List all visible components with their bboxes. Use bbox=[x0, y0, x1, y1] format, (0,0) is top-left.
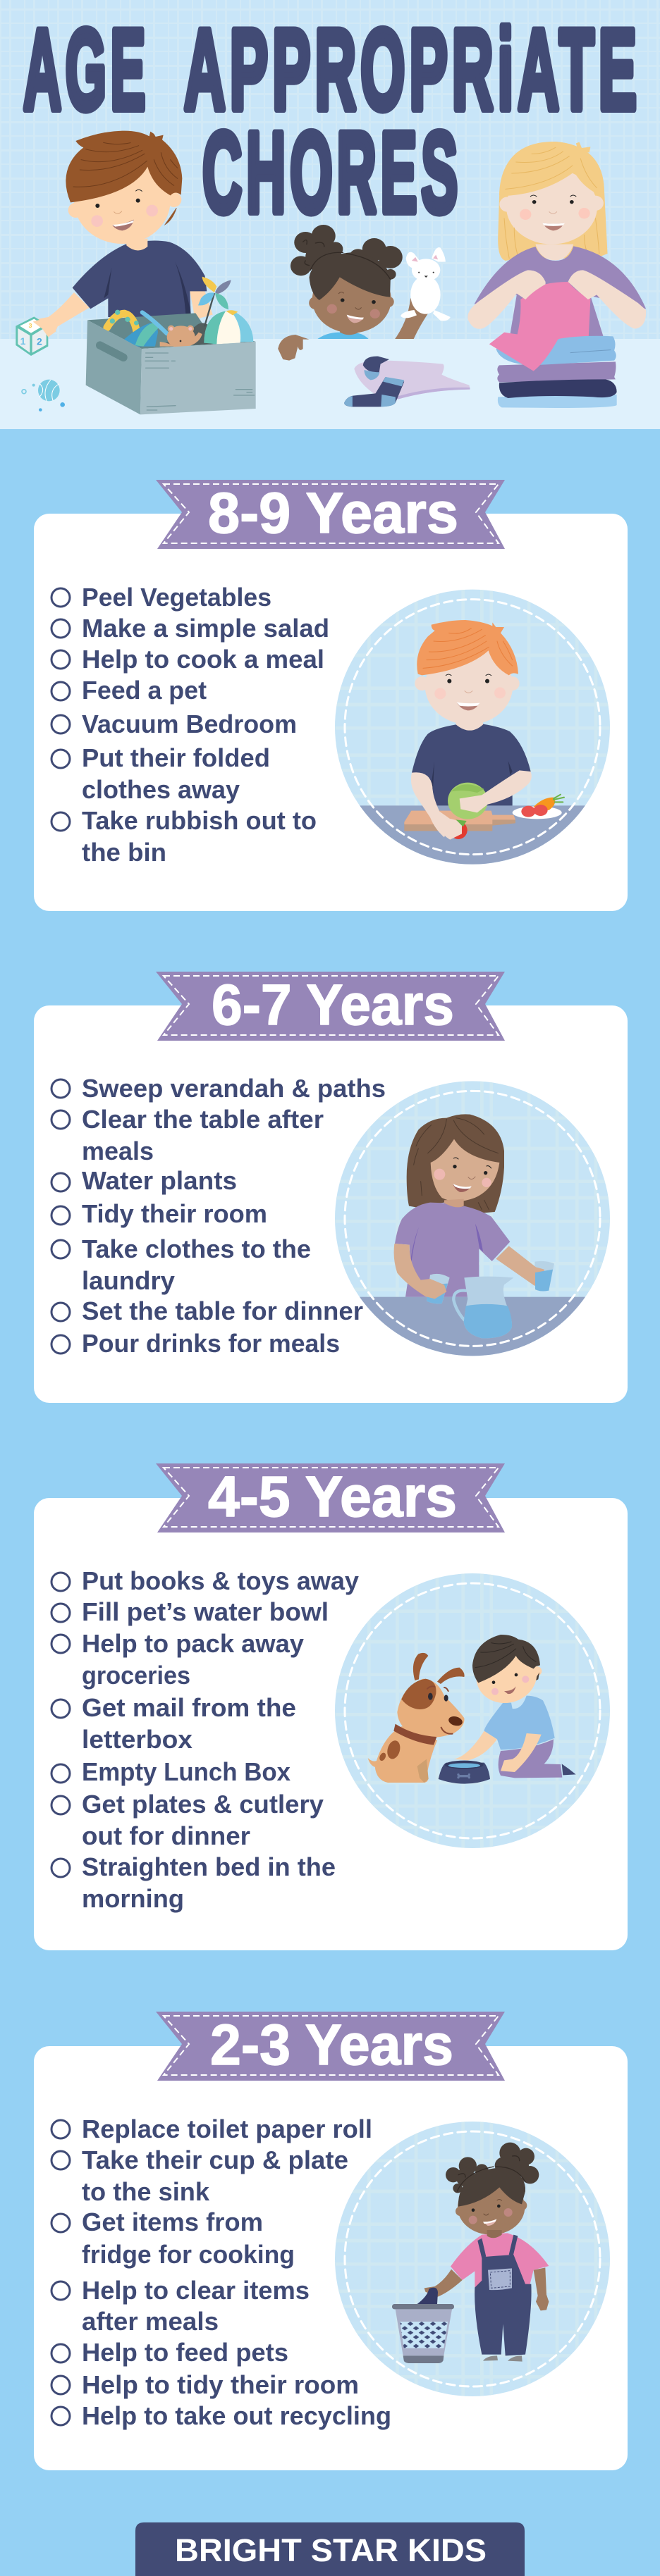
alphabet block in boy's hand: 3 bbox=[29, 322, 32, 329]
cutting board bbox=[404, 811, 515, 831]
ribbon heading: 4-5 Years bbox=[208, 1465, 457, 1529]
ribbon heading: 2-3 Years bbox=[210, 2013, 453, 2077]
cloth and socks bbox=[344, 357, 470, 407]
ribbon heading bbox=[156, 480, 505, 549]
chore checklist: Empty Lunch Box bbox=[82, 1757, 291, 1786]
bunny toy bbox=[401, 247, 451, 321]
folded clothes stack bbox=[489, 333, 617, 408]
card bbox=[34, 2046, 628, 2470]
chore checklist: Help to clear items bbox=[82, 2276, 310, 2305]
chore checklist: Feed a pet bbox=[82, 676, 207, 705]
toy plane bbox=[124, 323, 158, 347]
chore checklist: to the sink bbox=[82, 2177, 210, 2206]
plate with tomato and carrot bbox=[513, 806, 562, 819]
chore checklist: laundry bbox=[82, 1266, 175, 1295]
alphabet block in boy's hand: 2 bbox=[37, 335, 42, 347]
chore checklist: Fill pet’s water bowl bbox=[82, 1597, 329, 1626]
ribbon heading bbox=[156, 972, 505, 1041]
illustration: toddler with laundry basket bbox=[331, 2121, 613, 2403]
chore checklist: Make a simple salad bbox=[82, 614, 329, 643]
ribbon heading: 8-9 Years bbox=[208, 481, 458, 545]
boy with brown hair bbox=[33, 131, 213, 337]
footer brand bar bbox=[135, 2522, 525, 2576]
chore checklist: Pour drinks for meals bbox=[82, 1329, 340, 1358]
left cup and arm bbox=[427, 1274, 450, 1304]
panel: 6-7 years bbox=[34, 972, 628, 1403]
ribbon heading bbox=[156, 1463, 505, 1532]
chore checklist: Tidy their room bbox=[82, 1199, 267, 1228]
chore checklist bbox=[51, 583, 329, 867]
chore checklist bbox=[51, 1074, 386, 1358]
table surface bbox=[0, 339, 660, 429]
alphabet block in boy's hand bbox=[16, 316, 56, 356]
card bbox=[34, 514, 628, 911]
chore checklist: Water plants bbox=[82, 1166, 237, 1195]
chore checklist: Put their folded bbox=[82, 743, 270, 772]
chore checklist: Help to cook a meal bbox=[82, 645, 324, 674]
chore checklist: after meals bbox=[82, 2307, 219, 2336]
kneeling boy bbox=[453, 1635, 576, 1778]
illustration: boy preparing vegetables bbox=[331, 585, 613, 872]
chore checklist: Vacuum Bedroom bbox=[82, 710, 297, 738]
chore checklist: meals bbox=[82, 1137, 154, 1165]
chore checklist: morning bbox=[82, 1884, 184, 1913]
chore checklist: Take clothes to the bbox=[82, 1234, 311, 1263]
dog bbox=[368, 1653, 465, 1783]
toy box bbox=[86, 277, 256, 414]
header illustration panel bbox=[0, 0, 660, 429]
panel: 2-3 years bbox=[34, 2012, 628, 2470]
footer brand bar: BRIGHT STAR KIDS bbox=[175, 2532, 487, 2568]
chore checklist: Clear the table after bbox=[82, 1105, 324, 1134]
chore checklist: Peel Vegetables bbox=[82, 583, 271, 612]
chore checklist: Get mail from the bbox=[82, 1693, 296, 1722]
ribbon heading: 6-7 Years bbox=[212, 973, 454, 1037]
girl with curly buns and bunny bbox=[291, 225, 451, 342]
right cup and arm bbox=[534, 1261, 554, 1292]
title bbox=[23, 6, 641, 237]
panel: 4-5 years bbox=[34, 1463, 628, 1950]
water bowl bbox=[439, 1761, 490, 1784]
chore checklist: Help to feed pets bbox=[82, 2338, 288, 2367]
title: AGE bbox=[23, 6, 149, 134]
chore checklist: Help to tidy their room bbox=[82, 2370, 359, 2399]
card bbox=[34, 1005, 628, 1403]
chore checklist: Sweep verandah & paths bbox=[82, 1074, 386, 1103]
ribbon heading bbox=[156, 2012, 505, 2081]
card bbox=[34, 1498, 628, 1950]
alphabet block in boy's hand: 1 bbox=[20, 335, 26, 347]
chore checklist: the bin bbox=[82, 838, 166, 867]
pinwheel bbox=[198, 277, 231, 326]
toddler bbox=[424, 2143, 549, 2362]
chore checklist: clothes away bbox=[82, 775, 240, 804]
chore checklist: Set the table for dinner bbox=[82, 1296, 363, 1325]
chore checklist bbox=[51, 1566, 359, 1913]
chore checklist: Put books & toys away bbox=[82, 1566, 359, 1595]
water jug bbox=[453, 1277, 513, 1338]
chore checklist: letterbox bbox=[82, 1725, 192, 1754]
ring toy bbox=[107, 314, 137, 333]
chore checklist: Straighten bed in the bbox=[82, 1852, 336, 1881]
panel: 8-9 years bbox=[34, 480, 628, 911]
chore checklist: Help to take out recycling bbox=[82, 2401, 391, 2430]
chore checklist: out for dinner bbox=[82, 1821, 250, 1850]
girl's hand on table bbox=[278, 335, 310, 361]
chore checklist: Help to pack away bbox=[82, 1629, 304, 1658]
illustration: girl pouring drinks bbox=[331, 1078, 613, 1363]
chore checklist: groceries bbox=[82, 1661, 190, 1690]
chore checklist: Replace toilet paper roll bbox=[82, 2114, 372, 2143]
laundry basket bbox=[392, 2288, 454, 2363]
chore checklist: Get items from bbox=[82, 2207, 263, 2236]
beach ball bbox=[204, 310, 253, 344]
chore checklist: Get plates & cutlery bbox=[82, 1790, 324, 1819]
blonde girl folding laundry bbox=[344, 142, 646, 408]
chore checklist: Take their cup & plate bbox=[82, 2145, 348, 2174]
teddy bear bbox=[160, 326, 202, 348]
ball on the table bbox=[22, 380, 65, 411]
illustration: boy feeding dog bbox=[331, 1571, 613, 1853]
hands with vegetables bbox=[411, 772, 451, 837]
chore checklist: Take rubbish out to bbox=[82, 806, 317, 835]
chore checklist: fridge for cooking bbox=[82, 2240, 295, 2269]
chore checklist bbox=[51, 2114, 391, 2430]
